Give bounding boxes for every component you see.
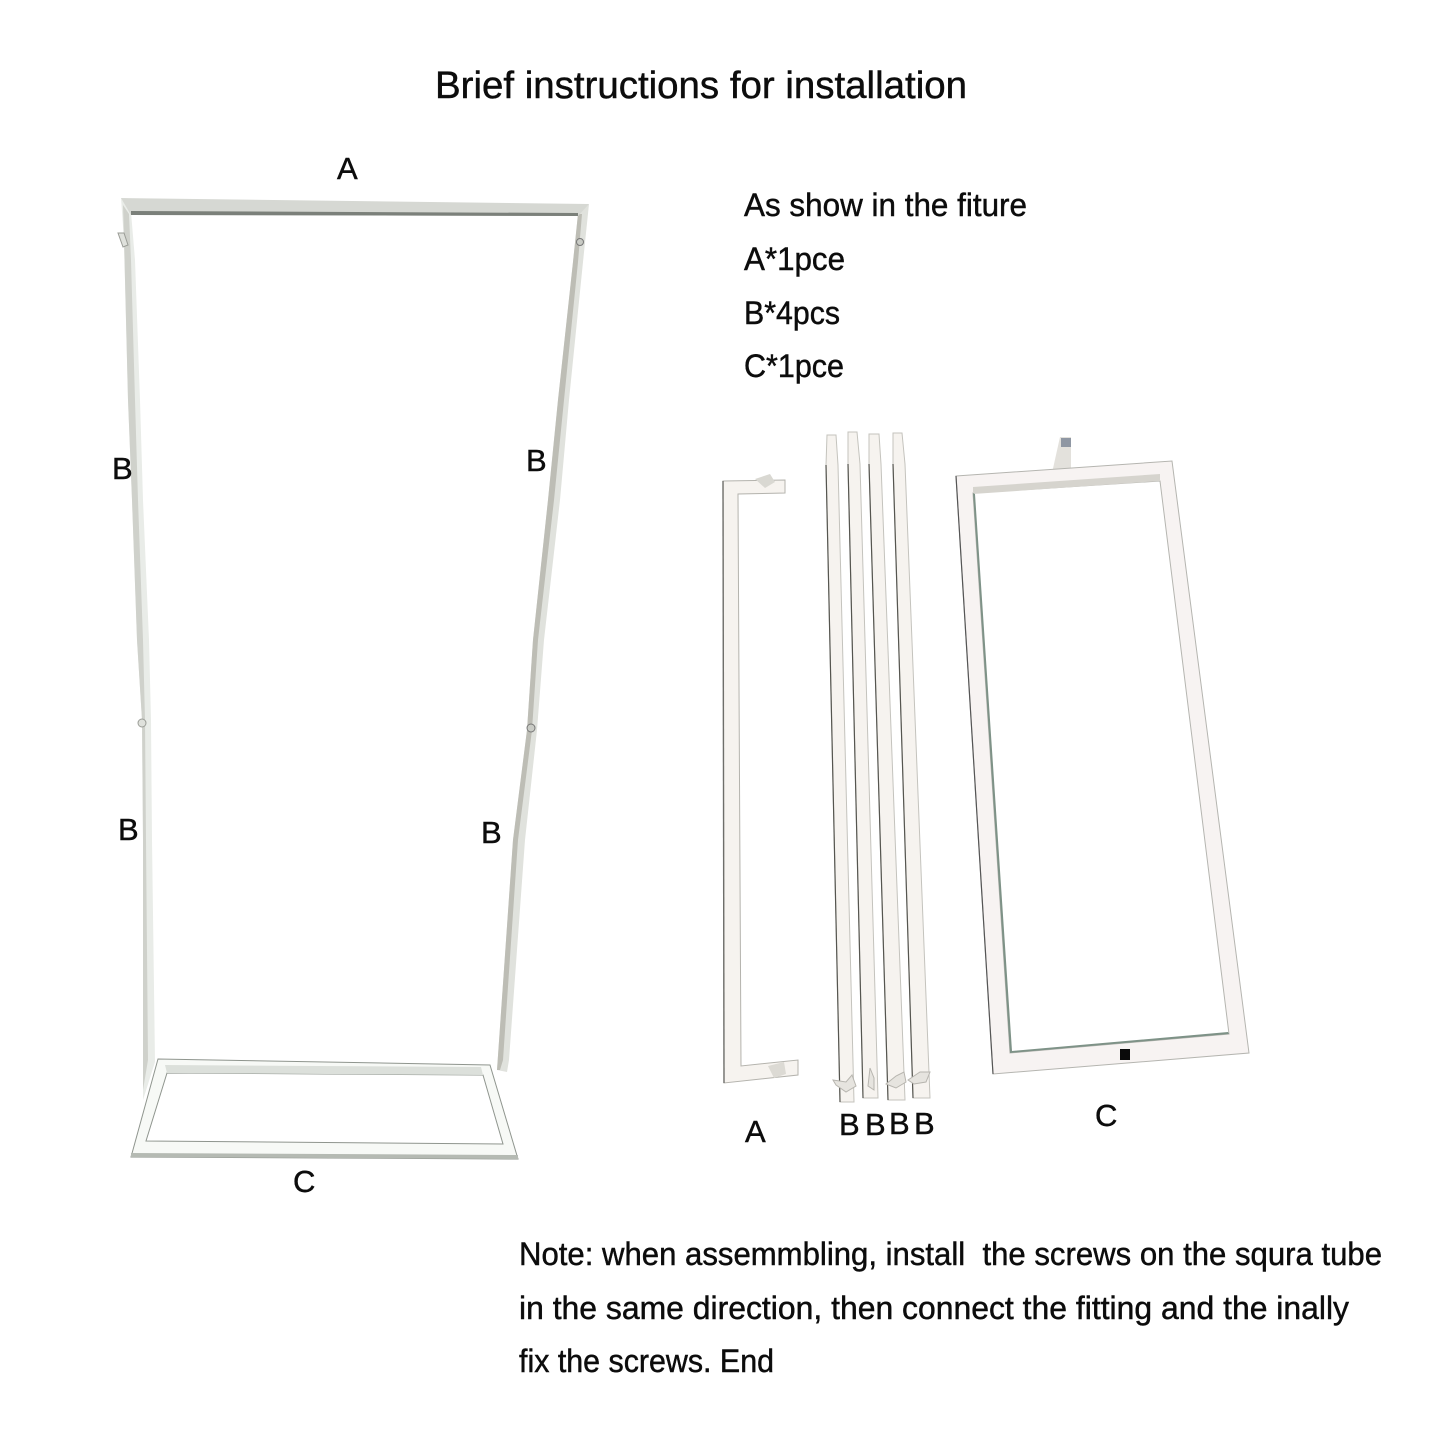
right tube screws bbox=[527, 238, 584, 732]
left tube screws bbox=[118, 233, 146, 727]
top bar A bbox=[121, 198, 589, 216]
base C bbox=[131, 1059, 518, 1159]
frame labels: B bbox=[118, 812, 139, 847]
part A bbox=[723, 474, 798, 1149]
assembled frame diagram bbox=[112, 151, 589, 1199]
part A: A bbox=[745, 1114, 766, 1149]
part C: C bbox=[1095, 1098, 1117, 1133]
left tube bbox=[121, 198, 155, 1100]
parts B: B bbox=[865, 1107, 886, 1142]
frame labels: B bbox=[112, 451, 133, 486]
part C bbox=[956, 437, 1249, 1133]
title: Brief instructions for installation bbox=[435, 65, 967, 107]
frame labels: B bbox=[481, 815, 502, 850]
frame labels bbox=[112, 151, 547, 1199]
note: fix the screws. End bbox=[519, 1343, 774, 1379]
frame labels: C bbox=[293, 1164, 315, 1199]
parts list: A*1pce bbox=[744, 241, 845, 277]
frame labels: B bbox=[526, 443, 547, 478]
note bbox=[519, 1236, 1382, 1379]
right tube bbox=[497, 204, 589, 1072]
parts list: C*1pce bbox=[744, 348, 844, 384]
parts list bbox=[744, 187, 1027, 384]
frame labels: A bbox=[337, 151, 358, 186]
parts list: B*4pcs bbox=[744, 295, 840, 331]
note: Note: when assemmbling, install the screws on the squra tube bbox=[519, 1236, 1382, 1272]
parts B: B bbox=[914, 1106, 935, 1141]
parts B bbox=[826, 432, 935, 1142]
note: in the same direction, then connect the fitting and the inally bbox=[519, 1290, 1349, 1326]
parts B: B bbox=[839, 1107, 860, 1142]
parts B: B bbox=[889, 1106, 910, 1141]
parts list: As show in the fiture bbox=[744, 187, 1027, 223]
